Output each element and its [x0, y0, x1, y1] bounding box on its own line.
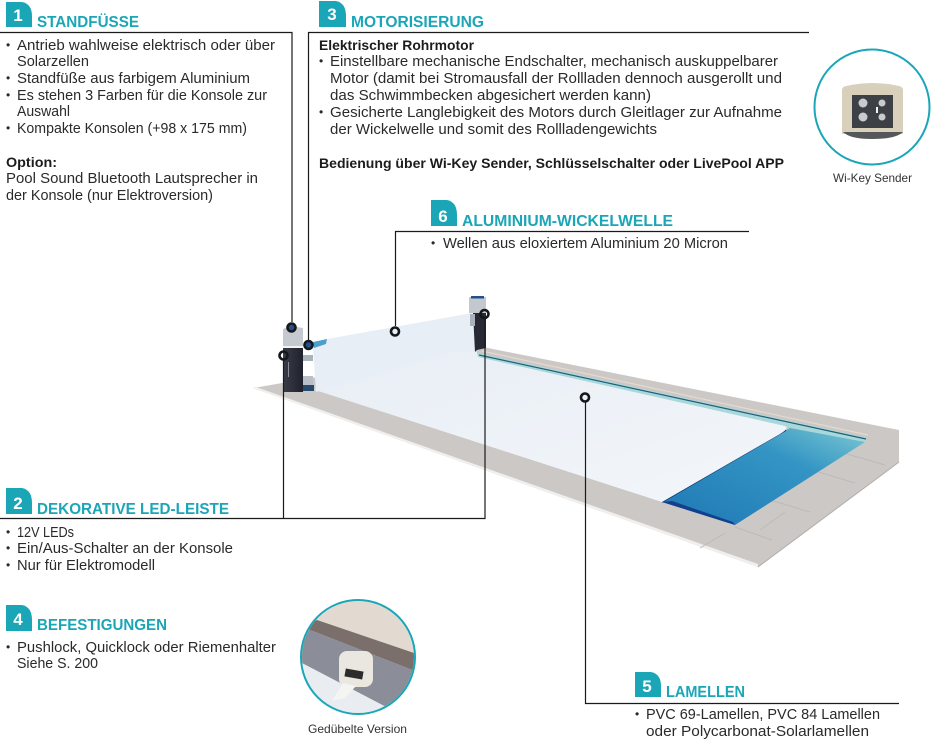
badge 4: 4 — [13, 610, 23, 629]
text block 5 — [635, 706, 880, 740]
pool channel — [477, 353, 868, 443]
text block 5: oder Polycarbonat-Solarlamellen — [646, 723, 869, 740]
text block 3: Elektrischer Rohrmotor — [319, 37, 475, 53]
text block 1: Auswahl — [17, 103, 70, 120]
section 4: Befestigungen — [6, 605, 276, 672]
pool cover flat — [315, 345, 787, 502]
text block 1: Standfüße aus farbigem Aluminium — [17, 70, 250, 87]
text block 3: der Wickelwelle und somit des Rollladengewichts — [330, 121, 657, 138]
right post — [469, 296, 486, 352]
text block 2: • — [6, 558, 10, 572]
text block 1: • — [6, 88, 10, 102]
text block 3: • — [319, 54, 323, 68]
text block 3: Bedienung über Wi-Key Sender, Schlüsselschalter oder LivePool APP — [319, 155, 784, 171]
text block 1: • — [6, 121, 10, 135]
text block 1: • — [6, 71, 10, 85]
text block 1: Pool Sound Bluetooth Lautsprecher in — [6, 170, 258, 187]
badge 3 — [319, 1, 346, 27]
badge 5 — [635, 672, 661, 697]
caption: Wi-Key Sender: Wi-Key Sender — [833, 171, 912, 185]
left post — [283, 326, 314, 392]
badge 6 — [431, 200, 457, 226]
text block 1: Es stehen 3 Farben für die Konsole zur — [17, 87, 267, 104]
text block 4: Siehe S. 200 — [17, 655, 98, 672]
text block 2: • — [6, 525, 10, 539]
badge 2 — [6, 488, 32, 514]
water — [662, 428, 865, 525]
heading 3: MOTORISIERUNG — [351, 14, 484, 31]
text block 1: Solarzellen — [17, 53, 89, 70]
heading 4: BEFESTIGUNGEN — [37, 617, 167, 634]
section 6: Aluminium-Wickelwelle — [431, 200, 728, 252]
text block 1: Kompakte Konsolen (+98 x 175 mm) — [17, 120, 247, 137]
text block 2: • — [6, 541, 10, 555]
text block 1: Option: — [6, 154, 57, 170]
text block 5: • — [635, 707, 639, 721]
heading 1: STANDFÜSSE — [37, 12, 139, 31]
text block 1 — [6, 37, 275, 204]
icon: Wi-Key Sender remote — [814, 50, 930, 164]
text block 3: Einstellbare mechanische Endschalter, mechanisch auskuppelbarer — [330, 53, 778, 70]
heading 6: ALUMINIUM-WICKELWELLE — [462, 213, 673, 230]
badge 4 — [6, 605, 32, 631]
badge 1 — [6, 2, 32, 27]
text block 2: Nur für Elektromodell — [17, 557, 155, 574]
text block 4: • — [6, 640, 10, 654]
text block 3 — [319, 37, 784, 171]
text block 1: Antrieb wahlweise elektrisch oder über — [17, 37, 275, 54]
badge 6: 6 — [438, 207, 448, 226]
text block 6: • — [431, 236, 435, 250]
text block 1: der Konsole (nur Elektroversion) — [6, 187, 213, 204]
section 2: Dekorative LED-Leiste — [6, 488, 233, 574]
section 1: Standfüsse — [6, 2, 275, 204]
section 5: Lamellen — [635, 672, 880, 740]
text block 3: Motor (damit bei Stromausfall der Rollladen dennoch ausgerollt und — [330, 70, 782, 87]
text block 3: Gesicherte Langlebigkeit des Motors durch Gleitlager zur Aufnahme — [330, 104, 782, 121]
roller end parts — [303, 355, 313, 361]
text block 6: Wellen aus eloxiertem Aluminium 20 Micron — [443, 235, 728, 252]
text block 4 — [6, 639, 276, 672]
text block 1: • — [6, 38, 10, 52]
text block 4: Pushlock, Quicklock oder Riemenhalter — [17, 639, 276, 656]
text block 3: • — [319, 105, 323, 119]
text block 3: das Schwimmbecken abgesichert werden kann) — [330, 87, 651, 104]
heading 2: DEKORATIVE LED-LEISTE — [37, 501, 229, 518]
badge 5: 5 — [642, 677, 652, 696]
heading 5: LAMELLEN — [666, 684, 745, 701]
badge 1: 1 — [13, 6, 23, 25]
text block 2: Ein/Aus-Schalter an der Konsole — [17, 540, 233, 557]
icon: Gedübelte Version fastening photo — [300, 600, 420, 720]
badge 2: 2 — [13, 494, 23, 513]
badge 3: 3 — [327, 5, 337, 24]
roller cover — [313, 313, 476, 392]
text block 2: 12V LEDs — [17, 524, 74, 541]
pool illustration — [253, 296, 899, 567]
section 3: Motorisierung — [319, 1, 784, 171]
text block 2 — [6, 524, 233, 574]
pool deck — [253, 347, 899, 567]
caption: Gedübelte Version: Gedübelte Version — [308, 722, 407, 736]
text block 5: PVC 69-Lamellen, PVC 84 Lamellen — [646, 706, 880, 723]
